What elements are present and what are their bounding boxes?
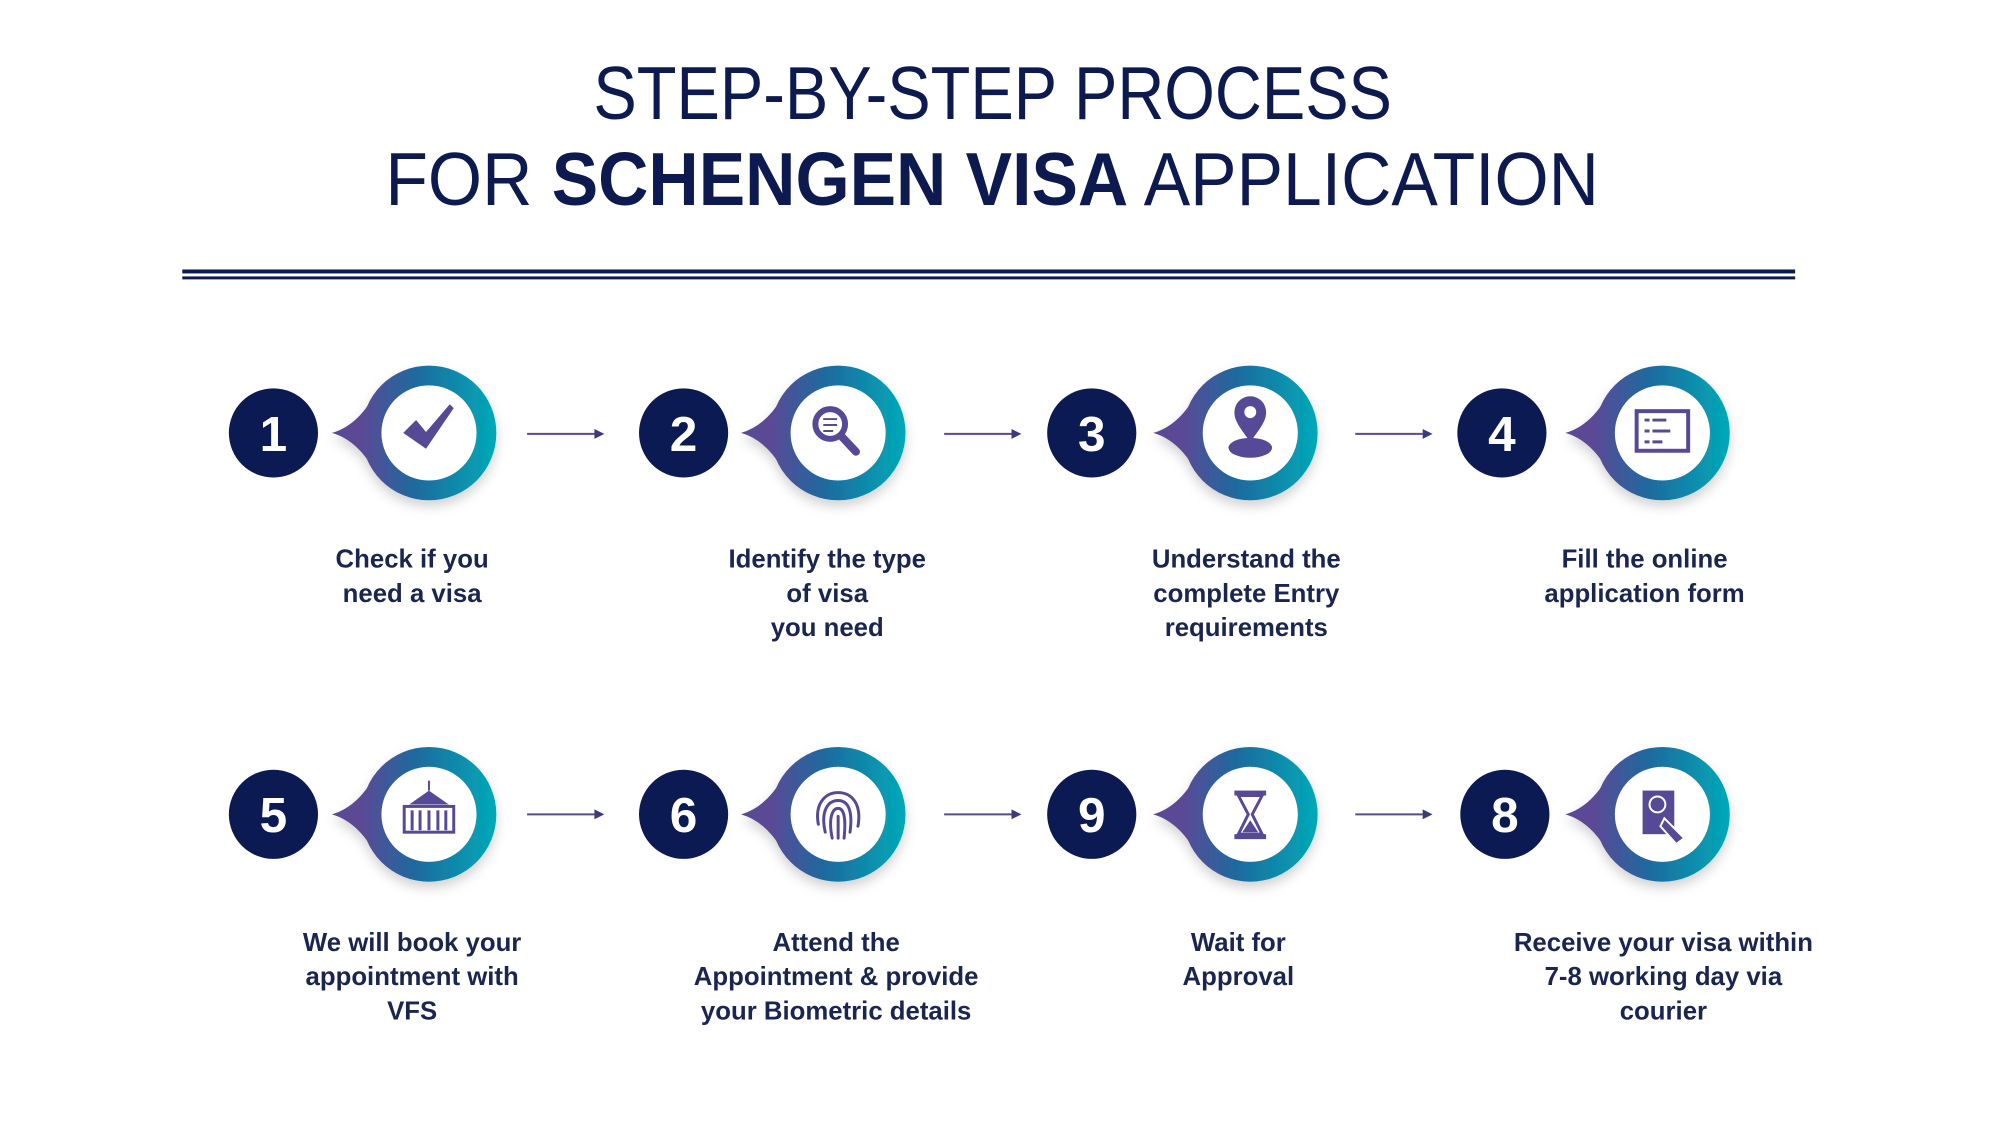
- step 4: Fill the online: [1562, 546, 1728, 574]
- title: [385, 51, 1599, 221]
- step 8: Receive your visa within: [1514, 929, 1813, 957]
- step 2: [639, 366, 926, 642]
- step 3: [1047, 366, 1341, 642]
- step 1: Check if you: [336, 546, 489, 574]
- step 5: 5: [260, 788, 287, 843]
- step 1: 1: [260, 407, 287, 462]
- arrow 5-6: [527, 809, 604, 819]
- step 8: 8: [1491, 788, 1519, 843]
- title: FOR SCHENGEN VISA APPLICATION: [385, 137, 1599, 221]
- step 8: courier: [1620, 997, 1707, 1025]
- step 3: requirements: [1165, 614, 1328, 642]
- step 1: [229, 366, 496, 608]
- step 9: 9: [1078, 788, 1106, 843]
- arrow 1-2: [527, 429, 604, 439]
- step 3: Understand the: [1152, 546, 1341, 574]
- step 5: appointment with: [306, 963, 519, 991]
- step 8: [1460, 747, 1813, 1025]
- step 9: Approval: [1183, 963, 1294, 991]
- title: STEP-BY-STEP PROCESS: [593, 51, 1392, 135]
- step 2: 2: [670, 407, 697, 462]
- step 1: need a visa: [343, 580, 482, 608]
- step 6: [639, 747, 978, 1025]
- step 3: 3: [1078, 407, 1106, 462]
- step 2: Identify the type: [729, 546, 926, 574]
- step 5: We will book your: [303, 929, 521, 957]
- step 9: Wait for: [1191, 929, 1286, 957]
- step 3: complete Entry: [1153, 580, 1340, 608]
- arrow 2-3: [944, 429, 1021, 439]
- step 2: of visa: [786, 580, 869, 608]
- arrow 6-9: [944, 809, 1021, 819]
- step 4: application form: [1544, 580, 1745, 608]
- step 6: Appointment & provide: [694, 963, 978, 991]
- step 6: 6: [670, 788, 697, 843]
- step 2: you need: [771, 614, 884, 642]
- step 9: [1047, 747, 1318, 991]
- arrow 9-8: [1355, 809, 1433, 819]
- step 5: VFS: [387, 997, 437, 1025]
- step 6: Attend the: [772, 929, 900, 957]
- step 5: [229, 747, 521, 1025]
- step 8: 7-8 working day via: [1545, 963, 1783, 991]
- arrow 3-4: [1355, 429, 1433, 439]
- step 6: your Biometric details: [701, 997, 971, 1025]
- step 4: [1457, 366, 1745, 608]
- step 4: 4: [1488, 407, 1516, 462]
